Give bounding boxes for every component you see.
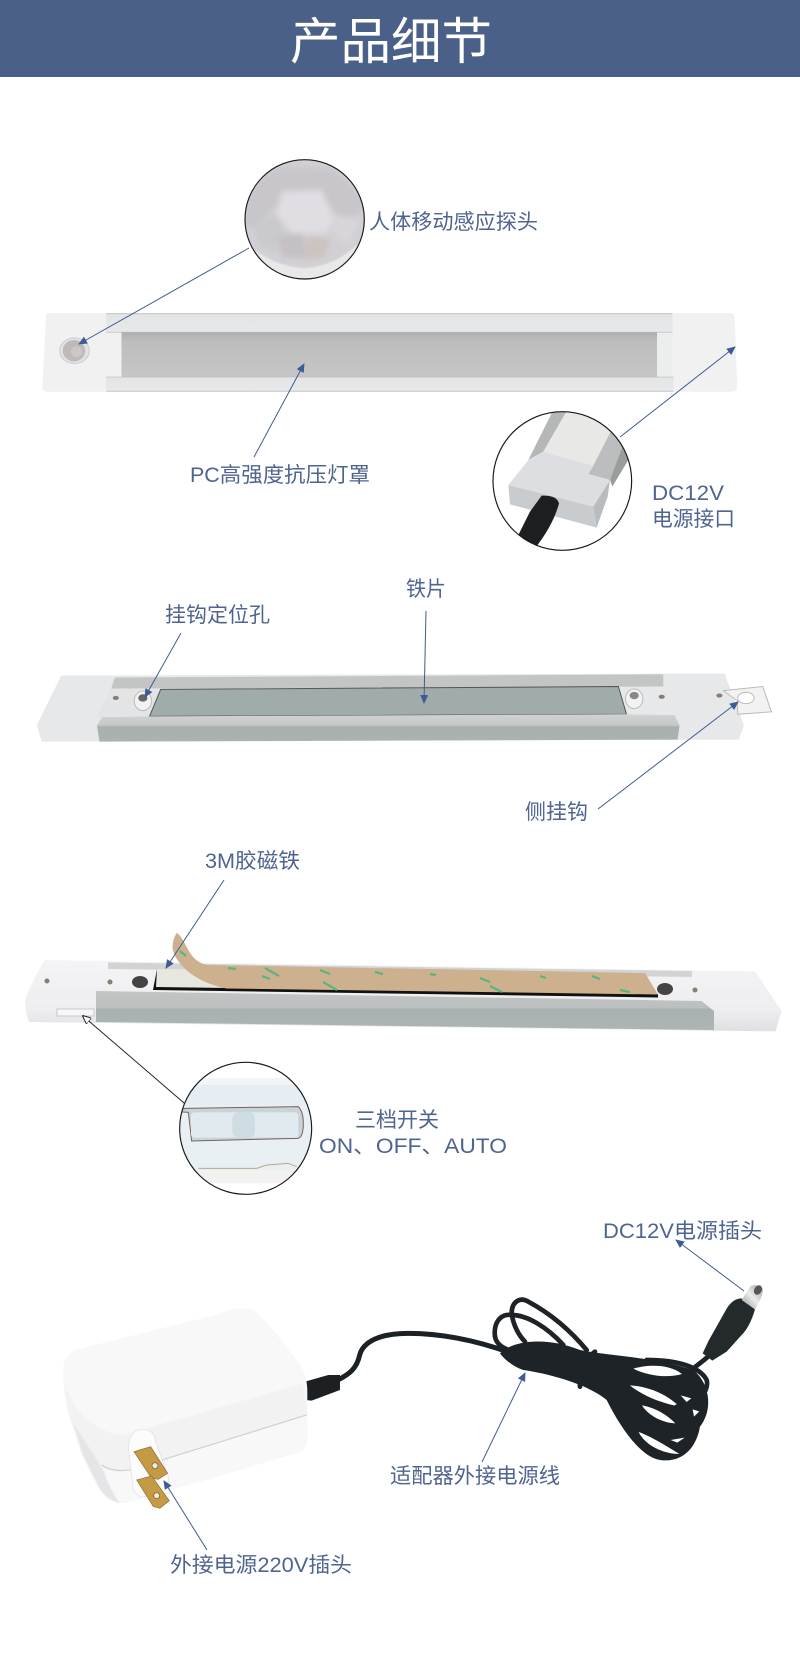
arrow: iron sheet — [424, 611, 426, 703]
label: PC cover: PC高强度抗压灯罩 — [190, 464, 370, 487]
arrow: power cord — [482, 1373, 525, 1462]
title: 产品细节 — [290, 14, 492, 70]
arrow: side hook — [598, 702, 738, 809]
label: iron sheet: 铁片 — [406, 578, 446, 601]
adapter shading — [64, 1383, 307, 1471]
label: ON OFF AUTO: ON、OFF、AUTO — [319, 1135, 507, 1158]
hook holes — [113, 689, 722, 711]
3M tape — [173, 933, 658, 994]
callout circle: motion sensor — [242, 160, 367, 283]
header banner — [0, 0, 800, 77]
label: three-position switch: 三档开关 — [355, 1109, 439, 1132]
adapter body — [63, 1308, 307, 1503]
arrow: PC cover — [254, 364, 304, 457]
lamp back view with iron sheet — [37, 673, 771, 742]
label: 3M adhesive magnet: 3M胶磁铁 — [205, 850, 300, 873]
label: 220V plug: 外接电源220V插头 — [170, 1554, 352, 1577]
arrow: DC port — [620, 347, 735, 437]
strain relief — [305, 1375, 340, 1401]
arrow: hook positioning hole — [145, 633, 181, 697]
side hook — [723, 687, 771, 714]
arrow: 3M adhesive magnet — [166, 880, 224, 968]
label: hook positioning hole: 挂钩定位孔 — [165, 604, 270, 627]
label: adapter power cord: 适配器外接电源线 — [390, 1465, 560, 1488]
label: power interface: 电源接口 — [652, 508, 735, 531]
callout circle: switch — [175, 1062, 318, 1194]
mounting holes — [44, 976, 698, 995]
label: motion sensor: 人体移动感应探头 — [369, 211, 538, 234]
arrow: 220V plug — [164, 1481, 207, 1550]
lamp front view — [42, 313, 737, 392]
arrow: DC12V plug — [676, 1240, 744, 1291]
plug base — [128, 1429, 169, 1497]
plug prongs — [134, 1447, 169, 1508]
power adapter — [63, 1308, 340, 1508]
magnet — [152, 969, 658, 998]
callout circle: DC port — [493, 408, 633, 550]
switch on lamp — [57, 1009, 94, 1016]
power cable lead-in — [327, 1333, 510, 1385]
arrow: switch — [83, 1016, 191, 1109]
label: side hook: 侧挂钩 — [525, 801, 588, 824]
cable coil and DC plug — [495, 1284, 764, 1460]
label: DC12V power port: DC12V — [652, 482, 724, 505]
arrow: motion sensor — [79, 248, 249, 344]
label: DC12V plug: DC12V电源插头 — [603, 1220, 762, 1243]
sensor lens on lamp — [60, 338, 89, 364]
lamp back view with 3M magnet — [25, 933, 782, 1031]
